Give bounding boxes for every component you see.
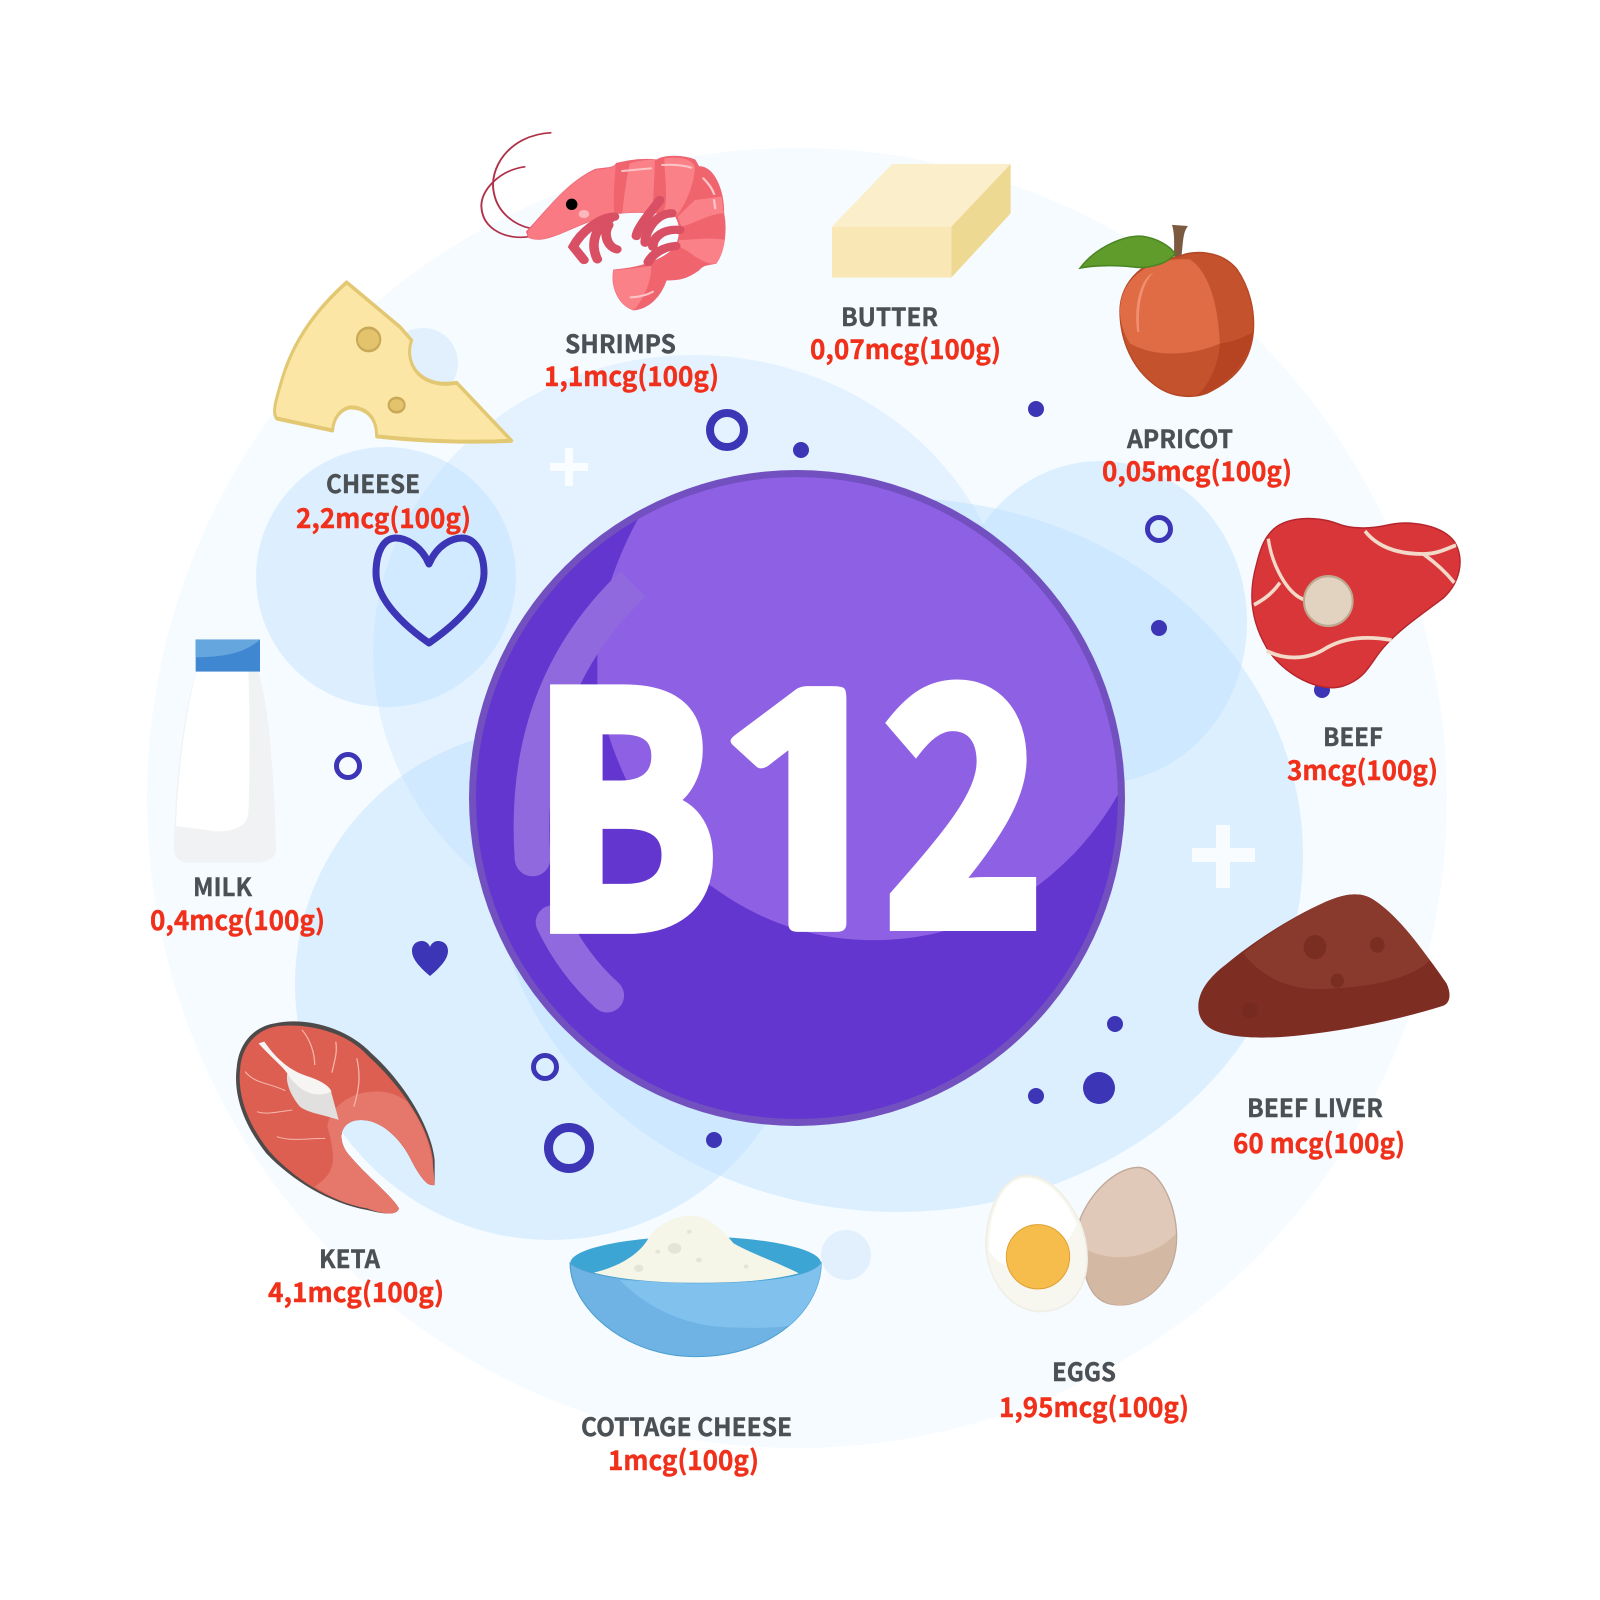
background blobs [147, 148, 1447, 1448]
label: beef: BEEF [1323, 718, 1383, 754]
B12 title: 2 [884, 549, 1044, 1017]
icon: beef [1252, 518, 1460, 688]
label: milk: 0,4mcg(100g) [150, 899, 325, 938]
label: cottage cheese: 1mcg(100g) [608, 1439, 759, 1478]
icon: salmon steak [236, 1021, 435, 1214]
decorative dots and rings [336, 401, 1330, 1168]
label: cheese: CHEESE [326, 465, 420, 501]
label: beef [1287, 718, 1438, 788]
icon: small heart [412, 941, 448, 976]
label: beef liver: 60 mcg(100g) [1233, 1122, 1405, 1161]
label: shrimps: SHRIMPS [565, 325, 676, 361]
label: apricot [1102, 420, 1292, 489]
icon: beef liver [1198, 894, 1450, 1038]
label: apricot: APRICOT [1126, 420, 1233, 456]
B12 title: B [531, 558, 718, 1019]
label: butter: 0,07mcg(100g) [810, 328, 1001, 367]
label: apricot: 0,05mcg(100g) [1102, 450, 1292, 489]
icon: butter [832, 164, 1011, 278]
label: beef liver: BEEF LIVER [1247, 1089, 1383, 1125]
icon: heart outline [376, 538, 484, 643]
label: cheese: 2,2mcg(100g) [296, 497, 471, 536]
icon: eggs [986, 1167, 1177, 1311]
label: cottage cheese: COTTAGE CHEESE [581, 1408, 792, 1444]
label: milk: MILK [193, 868, 253, 904]
label: cheese [296, 465, 471, 536]
label: keta: 4,1mcg(100g) [268, 1271, 444, 1310]
label: eggs: EGGS [1052, 1353, 1116, 1389]
label: eggs [999, 1353, 1189, 1425]
icon: apricot [1080, 225, 1254, 396]
label: beef liver [1233, 1089, 1405, 1161]
label: cottage cheese [581, 1408, 792, 1478]
label: milk [150, 868, 325, 938]
label: butter: BUTTER [841, 298, 938, 334]
B12 title [531, 549, 1044, 1019]
label: eggs: 1,95mcg(100g) [999, 1386, 1189, 1425]
label: keta [268, 1240, 444, 1310]
label: shrimps: 1,1mcg(100g) [544, 355, 719, 394]
plus signs [550, 448, 1255, 888]
label: beef: 3mcg(100g) [1287, 749, 1438, 788]
icon: milk bottle [174, 639, 276, 863]
B12 title: 1 [692, 662, 927, 974]
icon: bowl of cottage cheese [570, 1216, 827, 1357]
icon: cheese [275, 282, 512, 442]
label: keta: KETA [319, 1240, 381, 1276]
central B12 sphere [469, 450, 1164, 1126]
label: shrimps [544, 325, 719, 394]
label: butter [810, 298, 1001, 367]
icon: shrimp [481, 133, 725, 310]
